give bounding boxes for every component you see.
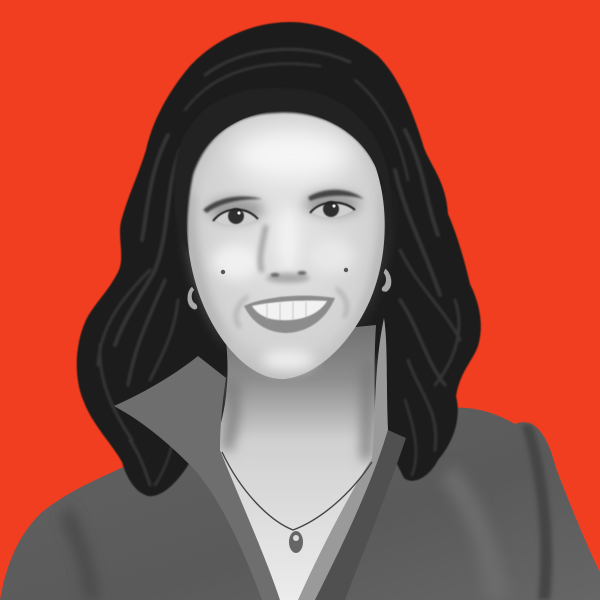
collar right	[298, 318, 388, 600]
right earring	[381, 268, 392, 292]
hair	[77, 22, 481, 496]
shirt	[0, 408, 600, 600]
right eye	[310, 201, 355, 217]
left eye	[213, 208, 258, 225]
face	[187, 111, 385, 379]
hair fringe	[174, 88, 392, 252]
left earring	[187, 286, 198, 310]
right eyebrow	[308, 190, 364, 201]
face shading	[188, 129, 385, 370]
necklace	[222, 452, 372, 553]
left eyebrow	[203, 196, 262, 213]
neck and chest	[216, 325, 376, 600]
mouth	[244, 296, 335, 333]
collar left	[114, 356, 280, 600]
hair strands	[98, 49, 460, 485]
moles	[221, 268, 348, 274]
nose	[266, 271, 310, 283]
shirt placket	[315, 430, 406, 600]
